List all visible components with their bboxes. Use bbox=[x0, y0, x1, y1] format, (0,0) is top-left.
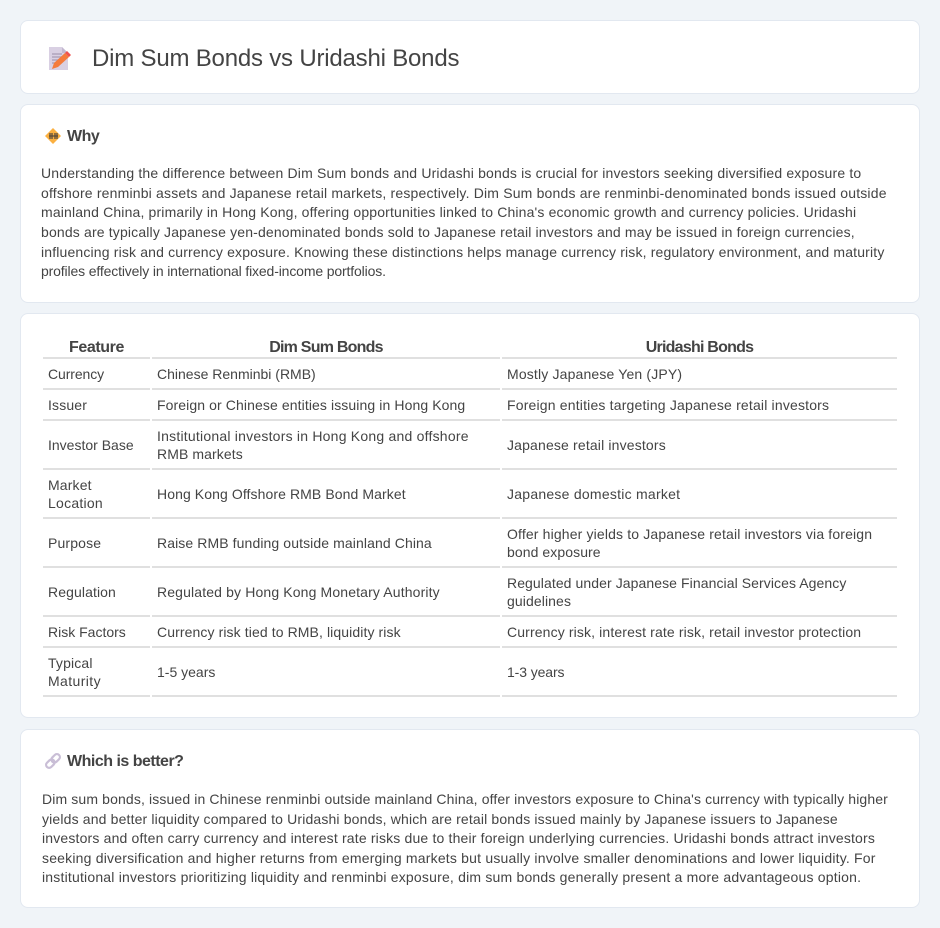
row: risk factors: Currency risk tied to RMB, liquidity risk bbox=[157, 624, 401, 640]
row: currency: Mostly Japanese Yen (JPY) bbox=[507, 366, 682, 382]
row: typical maturity: Maturity bbox=[48, 673, 101, 689]
row: currency: Currency bbox=[48, 366, 104, 382]
row: typical maturity: 1-3 years bbox=[507, 664, 564, 680]
row: risk factors: Currency risk, interest rate risk, retail investor protection bbox=[507, 624, 861, 640]
row: purpose: Offer higher yields to Japanese retail investors via foreign bbox=[507, 526, 872, 542]
panel: comparison table bbox=[20, 313, 920, 718]
row: investor base: Institutional investors in Hong Kong and offshore bbox=[157, 428, 469, 444]
row: risk factors: Risk Factors bbox=[48, 624, 126, 640]
table header bbox=[43, 339, 897, 359]
row: currency: Chinese Renminbi (RMB) bbox=[157, 366, 316, 382]
row: market location: Hong Kong Offshore RMB Bond Market bbox=[157, 486, 406, 502]
text block: why: influencing risk and currency exposure. Knowing these distinctions helps manage currency risk, regulatory environment, and maturity bbox=[41, 244, 884, 260]
row: regulation: Regulation bbox=[48, 584, 116, 600]
table header: Dim Sum Bonds bbox=[269, 339, 383, 356]
header panel bbox=[20, 20, 920, 94]
panel: why bbox=[20, 104, 920, 303]
icon: document with pencil bbox=[49, 47, 71, 70]
text block: which is better bbox=[42, 791, 888, 885]
text block: which is better: investors and often carry currency and interest rate risks due to their foreign underlying currencies. Uridashi bonds attract investors bbox=[42, 830, 875, 846]
text block: why: offshore renminbi assets and Japanese retail markets, respectively. Dim Sum bonds are renminbi-denominated bonds issued outside bbox=[41, 185, 887, 201]
row: purpose: bond exposure bbox=[507, 544, 601, 560]
row: regulation: Regulated under Japanese Financial Services Agency bbox=[507, 575, 846, 591]
panel: which is better bbox=[20, 729, 920, 908]
icon: warning diamond bbox=[45, 128, 61, 144]
table header: Uridashi Bonds bbox=[646, 339, 753, 356]
text block: which is better: institutional investors prioritizing liquidity and renminbi exposure, dim sum bonds generally present a more advantageous option. bbox=[42, 869, 861, 885]
row: market location: Location bbox=[48, 495, 103, 511]
text block: why: Understanding the difference between Dim Sum bonds and Uridashi bonds is crucial for investors seeking diversified exposure to bbox=[41, 165, 861, 181]
text block: why: bonds are typically Japanese yen-denominated bonds sold to Japanese retail investors and may be issued in foreign currencies, bbox=[41, 224, 855, 240]
row: regulation: guidelines bbox=[507, 593, 571, 609]
row: typical maturity: 1-5 years bbox=[157, 664, 215, 680]
row: investor base bbox=[43, 428, 897, 470]
row: market location bbox=[43, 477, 897, 519]
text block: which is better: yields and better liquidity compared to Uridashi bonds, which are retail bonds issued mainly by Japanese issuers to Japanese bbox=[42, 811, 838, 827]
row: regulation: Regulated by Hong Kong Monetary Authority bbox=[157, 584, 440, 600]
row: typical maturity bbox=[43, 655, 897, 697]
row: issuer: Foreign or Chinese entities issuing in Hong Kong bbox=[157, 397, 465, 413]
row: typical maturity: Typical bbox=[48, 655, 93, 671]
row: regulation bbox=[43, 575, 897, 617]
heading: why: Why bbox=[67, 128, 99, 145]
text block: which is better: seeking diversification and higher returns from emerging markets but usually involve smaller denominations and lower liquidity. For bbox=[42, 850, 876, 866]
row: market location: Market bbox=[48, 477, 92, 493]
title: Dim Sum Bonds vs Uridashi Bonds bbox=[92, 45, 459, 72]
row: issuer: Foreign entities targeting Japanese retail investors bbox=[507, 397, 829, 413]
text block: why: profiles effectively in international fixed-income portfolios. bbox=[41, 263, 386, 279]
row: investor base: Investor Base bbox=[48, 437, 134, 453]
row: purpose: Raise RMB funding outside mainland China bbox=[157, 535, 432, 551]
row: risk factors bbox=[43, 624, 897, 648]
row: purpose: Purpose bbox=[48, 535, 101, 551]
row: issuer: Issuer bbox=[48, 397, 87, 413]
heading: which is better: Which is better? bbox=[67, 753, 183, 770]
row: investor base: Japanese retail investors bbox=[507, 437, 666, 453]
row: issuer bbox=[43, 397, 897, 421]
text block: which is better: Dim sum bonds, issued in Chinese renminbi outside mainland China, offer investors exposure to China's currency with typically higher bbox=[42, 791, 888, 807]
icon: link bbox=[45, 753, 61, 769]
text block: why: mainland China, primarily in Hong Kong, offering opportunities linked to China's economic growth and currency policies. Uridashi bbox=[41, 204, 856, 220]
row: currency bbox=[43, 366, 897, 390]
row: investor base: RMB markets bbox=[157, 446, 243, 462]
table header: Feature bbox=[69, 339, 124, 356]
row: purpose bbox=[43, 526, 897, 568]
text block: why bbox=[41, 165, 887, 279]
row: market location: Japanese domestic market bbox=[507, 486, 680, 502]
